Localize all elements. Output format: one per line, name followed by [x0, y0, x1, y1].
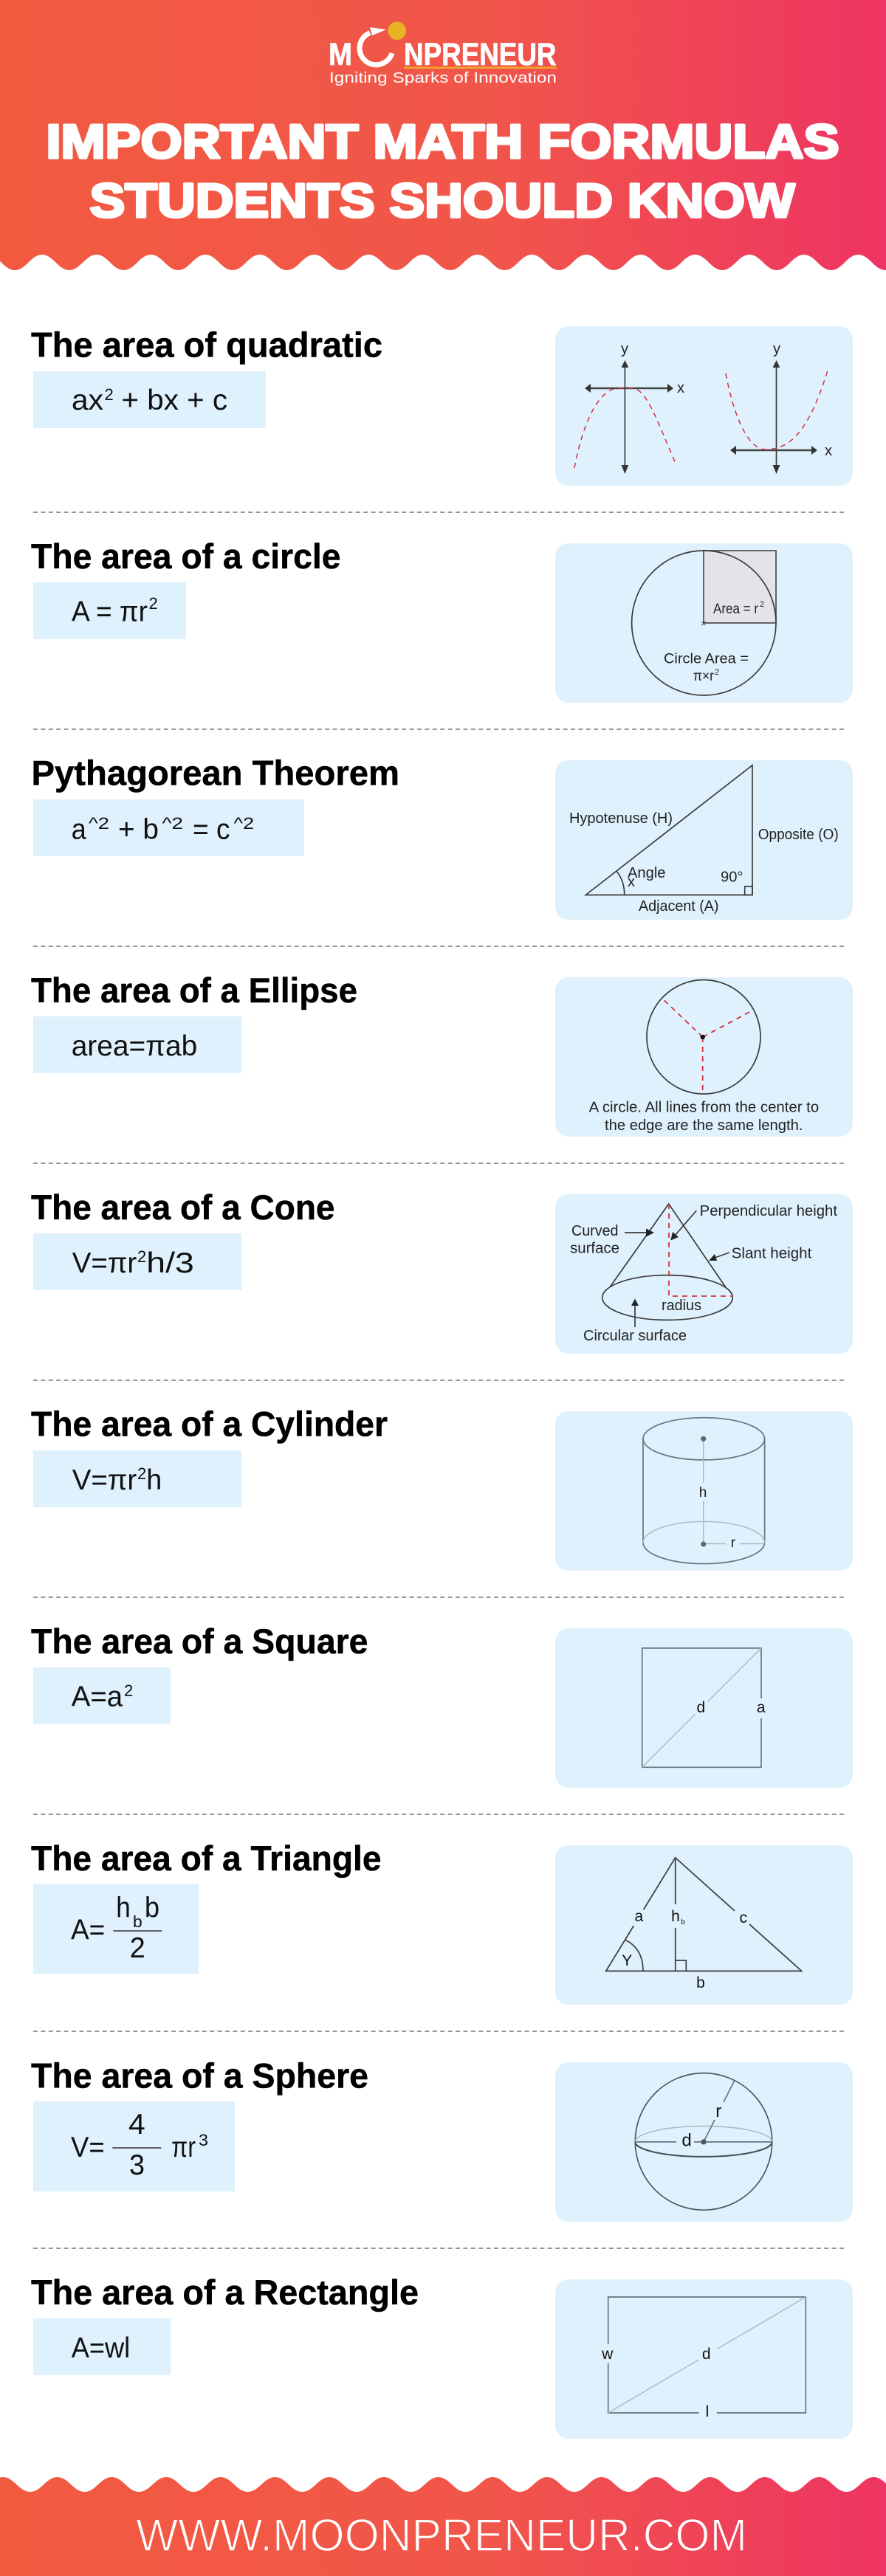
panel: triangle diagram: b — [681, 1918, 685, 1926]
panel: right triangle — [555, 760, 853, 920]
formula: quadratic: ax — [72, 385, 104, 416]
panel: cylinder diagram: h — [699, 1485, 707, 1501]
row: square — [31, 1622, 853, 1788]
panel: right triangle: Adjacent (A) — [639, 898, 719, 915]
formula: square: A=a — [72, 1681, 123, 1713]
formula: Pythagorean: = c — [193, 813, 230, 846]
formula: Pythagorean: + b — [118, 813, 159, 846]
panel: circle radii diagram — [555, 977, 853, 1137]
panel: triangle diagram: h — [671, 1908, 680, 1925]
panel: rectangle diagram — [555, 2279, 853, 2439]
heading: The area of a Cone — [31, 1188, 335, 1227]
formula: sphere — [33, 2101, 235, 2191]
panel: triangle diagram: Y — [622, 1952, 632, 1969]
formula: triangle: A= — [71, 1915, 105, 1946]
title: IMPORTANT MATH FORMULAS — [46, 114, 839, 168]
panel: circle diagram: Circle Area = — [664, 651, 749, 667]
formula: circle: A = πr — [72, 596, 148, 627]
formula: sphere: V= — [71, 2132, 105, 2163]
panel: circle diagram: Area = r — [713, 602, 759, 617]
formula: triangle: h — [116, 1893, 131, 1924]
formula: sphere: 4 — [128, 2109, 145, 2141]
formula: ellipse: area=πab — [72, 1030, 197, 1062]
formula: rectangle: A=wl — [72, 2332, 130, 2364]
logo: Moonpreneur: M — [329, 37, 352, 72]
panel: right triangle: Opposite (O) — [758, 827, 839, 843]
formula: quadratic — [33, 371, 266, 428]
panel: cylinder diagram — [555, 1411, 853, 1571]
logo: Moonpreneur — [329, 21, 557, 86]
panel: cone diagram: Circular surface — [583, 1328, 687, 1344]
panel: parabola graphs: x — [825, 443, 832, 459]
title: STUDENTS SHOULD KNOW — [90, 173, 795, 227]
formula: circle: 2 — [149, 594, 158, 613]
row: circle — [31, 537, 853, 703]
formula: Pythagorean: ^2 — [162, 814, 183, 833]
heading: The area of quadratic — [31, 325, 382, 365]
panel: cone diagram — [555, 1194, 853, 1354]
panel: cone diagram: Curved — [571, 1223, 619, 1239]
panel: cone diagram: Perpendicular height — [700, 1203, 837, 1219]
panel: circle diagram: π×r — [693, 669, 715, 684]
panel: sphere diagram — [555, 2062, 853, 2222]
panel: circle radii diagram: the edge are the same length. — [605, 1117, 803, 1134]
panel: circle diagram — [555, 543, 853, 703]
panel: parabola graphs: y — [621, 341, 628, 357]
formula: cylinder: h — [146, 1464, 162, 1496]
formula: sphere: 3 — [199, 2131, 208, 2149]
panel: sphere diagram: r — [715, 2101, 721, 2121]
formula: triangle: b — [133, 1912, 142, 1931]
panel: right triangle: x — [628, 874, 635, 890]
heading: The area of a Sphere — [31, 2056, 368, 2095]
heading: The area of a Triangle — [31, 1839, 381, 1878]
panel: triangle diagram: a — [634, 1908, 643, 1925]
panel: rectangle diagram: l — [706, 2403, 709, 2420]
panel: cone diagram: surface — [570, 1240, 619, 1256]
panel: triangle diagram — [555, 1845, 853, 2005]
panel: cylinder diagram: r — [731, 1535, 736, 1551]
formula: cylinder: V=πr — [72, 1464, 137, 1496]
heading: The area of a Ellipse — [31, 971, 357, 1010]
row: Pythagorean Theorem — [31, 753, 853, 920]
formula: cone: 2 — [137, 1247, 146, 1266]
row: cone — [31, 1188, 853, 1354]
formula: Pythagorean: a — [72, 813, 86, 846]
panel: parabola graphs: x — [677, 380, 684, 396]
formula: quadratic: 2 — [105, 385, 114, 404]
row: triangle — [31, 1839, 853, 2005]
row: ellipse — [31, 971, 853, 1137]
formula: triangle: b — [145, 1893, 159, 1924]
heading: The area of a Rectangle — [31, 2273, 419, 2312]
heading: The area of a Square — [31, 1622, 368, 1661]
formula: Pythagorean: ^2 — [89, 814, 109, 833]
panel: triangle diagram: b — [696, 1974, 705, 1991]
formula: ellipse — [33, 1016, 241, 1073]
heading: Pythagorean Theorem — [31, 753, 399, 793]
heading: The area of a circle — [31, 537, 341, 576]
row: cylinder — [31, 1404, 853, 1571]
footer website text: WWW.MOONPRENEUR.COM — [136, 2510, 747, 2561]
formula: cylinder — [33, 1450, 241, 1507]
panel: rectangle diagram: w — [601, 2346, 614, 2363]
formula: triangle: 2 — [130, 1932, 145, 1964]
formula: rectangle — [33, 2318, 171, 2375]
panel: square diagram: d — [696, 1699, 705, 1716]
logo: Moonpreneur: Igniting Sparks of Innovation — [329, 70, 557, 86]
heading: The area of a Cylinder — [31, 1404, 388, 1444]
formula: triangle — [33, 1884, 199, 1974]
formula: cone: V=πr — [72, 1247, 137, 1279]
panel: circle radii diagram: A circle. All lines from the center to — [589, 1100, 819, 1116]
formula: Pythagorean: ^2 — [233, 814, 254, 833]
header banner — [0, 0, 886, 270]
panel: triangle diagram: c — [739, 1909, 747, 1926]
title — [46, 114, 839, 227]
formula: circle — [33, 582, 186, 639]
panel: square diagram: a — [757, 1699, 766, 1716]
panel: circle diagram: 2 — [715, 668, 719, 677]
formula: cone — [33, 1233, 241, 1290]
formula: cone: h/3 — [146, 1247, 194, 1279]
panel: right triangle: Hypotenuse (H) — [569, 810, 673, 827]
formula: cylinder: 2 — [137, 1464, 146, 1483]
formula: sphere: πr — [171, 2132, 196, 2163]
panel: parabola graphs: y — [773, 341, 780, 357]
panel: circle diagram: 2 — [760, 600, 764, 609]
panel: right triangle: 90° — [721, 869, 743, 886]
row: rectangle — [31, 2273, 853, 2439]
panel: parabola graphs — [555, 326, 853, 486]
panel: right triangle: Angle — [628, 865, 666, 881]
row: quadratic — [31, 325, 853, 486]
panel: square diagram — [555, 1628, 853, 1788]
panel: cone diagram: Slant height — [732, 1245, 812, 1261]
panel: sphere diagram: d — [681, 2130, 692, 2151]
formula: square — [33, 1667, 171, 1724]
formula: sphere: 3 — [129, 2149, 145, 2181]
logo: Moonpreneur: NPRENEUR — [404, 37, 557, 72]
footer banner — [0, 2477, 886, 2576]
row: sphere — [31, 2056, 853, 2222]
formula: quadratic: + bx + c — [121, 385, 227, 416]
formula: Pythagorean — [33, 799, 304, 856]
panel: cone diagram: radius — [662, 1298, 701, 1314]
panel: rectangle diagram: d — [702, 2346, 711, 2363]
panel: circle diagram: × — [701, 618, 707, 629]
formula: square: 2 — [124, 1681, 133, 1700]
